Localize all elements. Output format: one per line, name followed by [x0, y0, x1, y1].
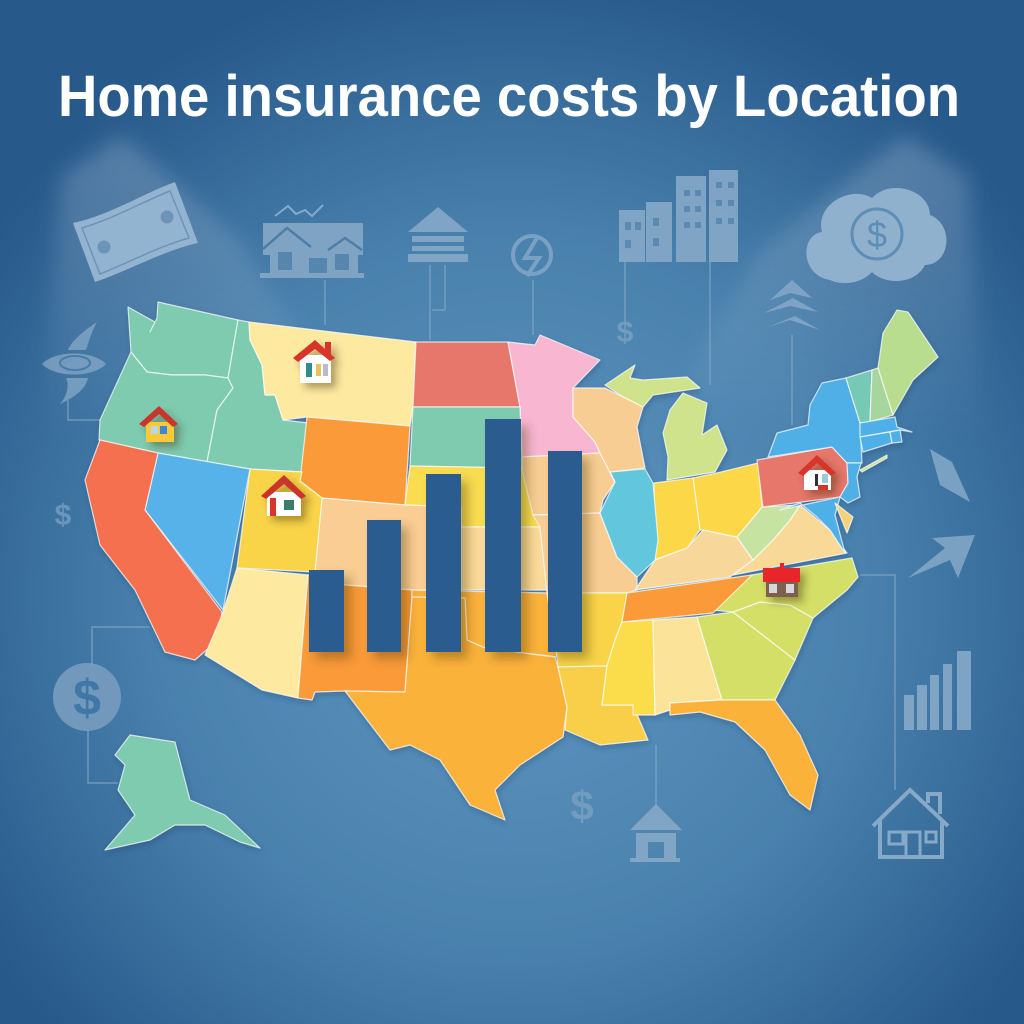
state: Colorado: [315, 498, 461, 590]
icon: dollar bottom: $: [570, 782, 594, 829]
state: Illinois: [600, 469, 658, 577]
state: Kentucky: [635, 530, 753, 590]
state: Texas: [345, 597, 567, 820]
background icons: [42, 170, 975, 862]
bar 4: [485, 419, 521, 652]
state: Vermont: [846, 370, 872, 423]
state: Missouri: [533, 513, 637, 593]
bar 3: [426, 474, 461, 652]
state: Arkansas: [547, 593, 627, 667]
state: Wisconsin: [573, 388, 645, 482]
house marker: Pennsylvania: [798, 455, 836, 490]
state: Mississippi: [602, 620, 655, 715]
icon: dollar left: $: [55, 499, 72, 532]
state: Maine: [878, 310, 938, 415]
map of the United States: [85, 302, 938, 850]
bar 2: [367, 520, 401, 652]
state: South Carolina: [733, 602, 813, 660]
connector lines: [68, 262, 895, 805]
state: Louisiana: [558, 666, 648, 745]
icon: banknote: [73, 182, 198, 282]
state: Tennessee: [622, 575, 752, 622]
state: North Dakota: [413, 342, 520, 407]
state: North Carolina: [713, 558, 858, 618]
house marker: Oregon: [139, 406, 178, 442]
state: Ohio: [693, 463, 762, 537]
state: Rhode Island: [890, 430, 902, 443]
state: Wyoming: [300, 417, 410, 505]
icon: bank: [408, 207, 468, 262]
state: New Jersey: [840, 463, 861, 503]
state: Michigan upper: [605, 365, 700, 407]
icon: city buildings: [619, 170, 738, 262]
title: Home insurance costs by Location: [58, 64, 960, 129]
state: Nevada: [145, 453, 250, 610]
state: Nebraska: [405, 466, 540, 527]
state: Massachusetts: [860, 417, 912, 437]
state: New Hampshire: [870, 368, 893, 422]
icon: leaf arrow: [930, 449, 970, 502]
icon: small dollar top: $: [617, 316, 634, 349]
icon: small house bottom: [630, 804, 682, 862]
state: Virginia: [733, 505, 847, 575]
state: West Virginia: [737, 505, 800, 560]
bar 1: [309, 570, 344, 652]
state: Oregon: [99, 352, 233, 462]
state: Florida: [670, 700, 818, 810]
icon: mini bar chart: [904, 651, 971, 730]
state: Idaho: [207, 320, 308, 472]
light beams: [40, 136, 985, 440]
state: Washington: [128, 302, 238, 378]
state: Alaska: [105, 735, 260, 850]
state: Oklahoma: [412, 590, 557, 657]
icon: hurricane: [42, 322, 106, 404]
icon: dollar coin: [53, 663, 121, 731]
icon: arrow up right: [908, 535, 975, 578]
state: Connecticut: [860, 432, 892, 452]
house marker: Utah: [261, 475, 306, 516]
icon: dollar coin: $: [73, 670, 101, 726]
house marker: North Carolina: [763, 563, 800, 597]
state: Minnesota: [508, 335, 600, 457]
state: Delaware: [835, 503, 853, 533]
state: South Dakota: [410, 407, 522, 468]
icon: dollar cloud: [806, 188, 946, 283]
state: Arizona: [205, 568, 308, 698]
state: New Mexico: [298, 575, 412, 700]
icon: layered wind: [764, 280, 820, 330]
bar chart: [309, 419, 582, 652]
state: Iowa: [522, 453, 615, 515]
state: Montana: [249, 322, 416, 426]
state: Utah: [237, 469, 322, 572]
icon: storm circle: [513, 236, 551, 276]
state: Alabama: [653, 617, 722, 715]
state: California: [85, 440, 222, 660]
state: Kansas: [461, 527, 548, 590]
house marker: Montana: [293, 340, 335, 383]
bar 5: [548, 451, 582, 652]
state: Indiana: [654, 478, 700, 560]
state: New York: [768, 378, 862, 463]
icon: outline house: [873, 790, 948, 857]
state: Long Island: [860, 455, 887, 472]
state: Michigan lower: [663, 393, 727, 480]
state: Pennsylvania: [757, 447, 848, 507]
state: Maryland: [780, 497, 845, 553]
icon: house with arrow: [260, 205, 364, 278]
state: Georgia: [697, 612, 795, 700]
icon: dollar cloud: $: [867, 214, 887, 255]
